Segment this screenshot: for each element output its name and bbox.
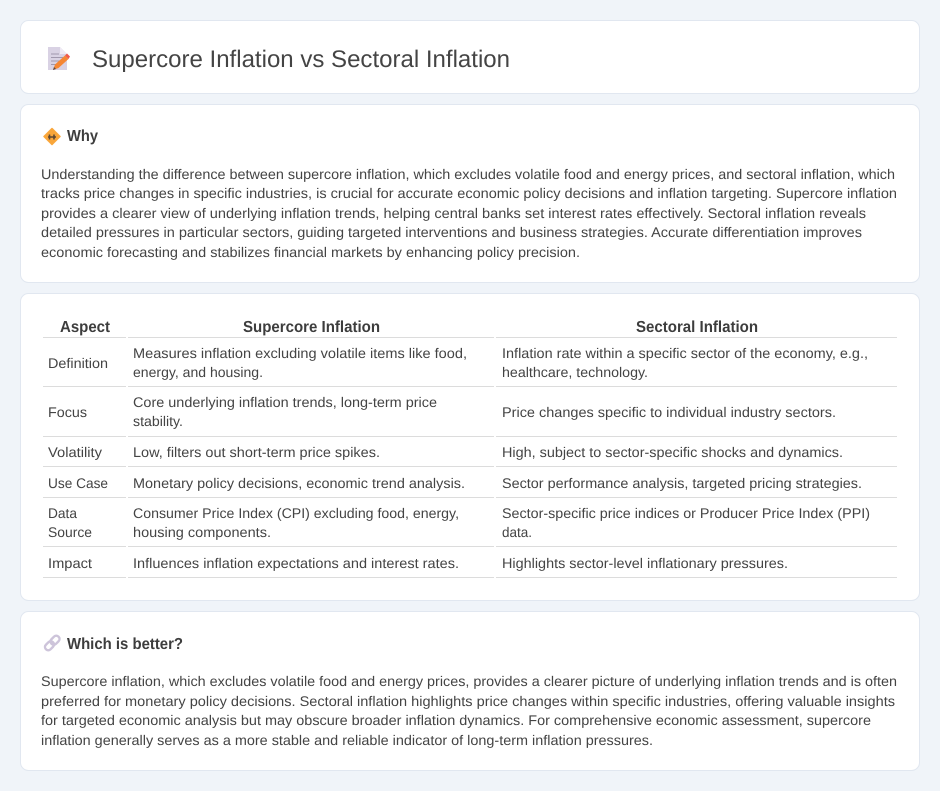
- row: focus: Core underlying inflation trends, long-term price: [133, 394, 437, 410]
- row: data source: Consumer Price Index (CPI) excluding food, energy,: [133, 505, 459, 521]
- row: definition: energy, and housing.: [133, 364, 263, 380]
- row: definition: Measures inflation excluding volatile items like food,: [133, 345, 467, 361]
- icon: diamond warning sign: [44, 128, 60, 144]
- row: data source: Source: [48, 524, 92, 540]
- table header row: Sectoral Inflation: [636, 319, 758, 336]
- row: volatility: [48, 444, 843, 460]
- row: definition: healthcare, technology.: [502, 364, 648, 380]
- row: data source: housing components.: [133, 524, 271, 540]
- text block: which is better paragraph: [41, 673, 897, 748]
- row: impact: Highlights sector-level inflationary pressures.: [502, 555, 788, 571]
- row: definition: Inflation rate within a specific sector of the economy, e.g.,: [502, 345, 868, 361]
- row: definition: [48, 345, 868, 380]
- row: definition: Definition: [48, 355, 108, 371]
- row: volatility: High, subject to sector-specific shocks and dynamics.: [502, 444, 843, 460]
- row: use case: Use Case: [48, 475, 108, 491]
- row: focus: stability.: [133, 413, 183, 429]
- text block: which is better paragraph: inflation generally serves as a more stable and reliable indicator of long-term inflation pressures.: [41, 732, 653, 748]
- row: data source: data.: [502, 524, 532, 540]
- row: volatility: Volatility: [48, 444, 102, 460]
- icon: memo and pencil: [48, 47, 70, 70]
- row: focus: Price changes specific to individual industry sectors.: [502, 404, 836, 420]
- text block: which is better paragraph: for targeted economic analysis but may obscure broader inflation dynamics. For comprehensive economic assessment, supercore: [41, 712, 871, 728]
- panel: why: [20, 104, 920, 282]
- row: data source: Data: [48, 505, 77, 521]
- row: impact: [48, 555, 788, 571]
- text block: why paragraph: economic forecasting and stabilizes financial markets by enhancing policy precision.: [41, 244, 580, 260]
- row: use case: [48, 475, 862, 491]
- panel: header: [20, 20, 920, 94]
- text block: which is better paragraph: preferred for monetary policy decisions. Sectoral inflation highlights price changes within specific industries, offering valuable insights: [41, 693, 895, 709]
- row: impact: Impact: [48, 555, 92, 571]
- title: Supercore Inflation vs Sectoral Inflation: [92, 46, 510, 73]
- text block: why paragraph: provides a clearer view of underlying inflation trends, helping central banks set interest rates effectively. Sectoral inflation reveals: [41, 205, 866, 221]
- panel: which is better: [20, 612, 920, 770]
- row: data source: [48, 505, 870, 540]
- heading: why: Why: [67, 128, 98, 145]
- text block: why paragraph: [41, 166, 897, 260]
- text block: why paragraph: Understanding the difference between supercore inflation, which excludes volatile food and energy prices, and sectoral inflation, which: [41, 166, 895, 182]
- row: focus: [48, 394, 836, 429]
- table header row: [60, 319, 758, 336]
- row: impact: Influences inflation expectations and interest rates.: [133, 555, 459, 571]
- row: focus: Focus: [48, 404, 87, 420]
- text block: why paragraph: tracks price changes in specific industries, is crucial for accurate economic policy decisions and inflation targeting. Supercore inflation: [41, 185, 897, 201]
- table header row: Aspect: [60, 319, 111, 336]
- text block: why paragraph: detailed pressures in particular sectors, guiding targeted interventions and business strategies. Accurate differentiation improves: [41, 224, 862, 240]
- text block: which is better paragraph: Supercore inflation, which excludes volatile food and energy prices, provides a clearer picture of underlying inflation trends and is often: [41, 673, 897, 689]
- row: volatility: Low, filters out short-term price spikes.: [133, 444, 380, 460]
- heading: which is better: Which is better?: [67, 636, 183, 653]
- panel: comparison table: [20, 294, 920, 600]
- icon: chain link: [44, 634, 61, 652]
- row: use case: Sector performance analysis, targeted pricing strategies.: [502, 475, 862, 491]
- row: data source: Sector-specific price indices or Producer Price Index (PPI): [502, 505, 870, 521]
- table header row: Supercore Inflation: [243, 319, 380, 336]
- row: use case: Monetary policy decisions, economic trend analysis.: [133, 475, 465, 491]
